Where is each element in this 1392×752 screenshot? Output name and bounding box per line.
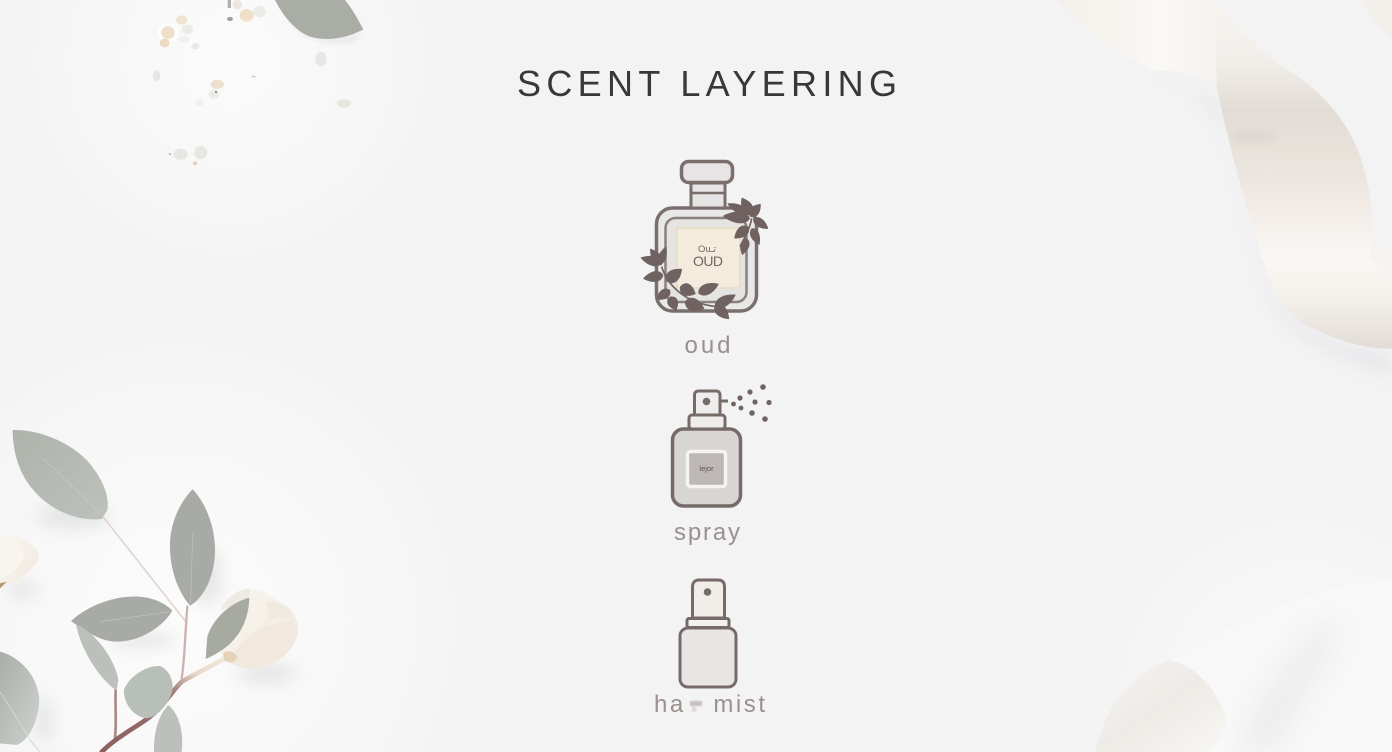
ribbon back — [1170, 580, 1392, 752]
leaf shadows — [8, 505, 297, 743]
leaf: left edge — [0, 652, 39, 745]
petals and seeds — [153, 0, 351, 165]
ribbon front fold — [1095, 660, 1227, 752]
ribbon corner — [1360, 0, 1392, 41]
title: SCENT LAYERING — [517, 63, 897, 104]
label smudge — [686, 693, 704, 714]
icon: oud perfume bottle — [639, 162, 771, 323]
leaf: round — [124, 666, 173, 718]
decoration: leaf and petals top left — [153, 0, 365, 165]
spray mist dots — [731, 384, 772, 422]
leaf: narrow — [76, 624, 118, 691]
item: oud bottle — [639, 162, 771, 359]
ribbon shadow — [1153, 73, 1392, 377]
decoration: satin ribbon top right — [1057, 0, 1392, 377]
bottle label: Ouتـ — [698, 244, 716, 255]
leaf: upright — [170, 489, 215, 606]
leaf: horizontal — [71, 597, 172, 642]
ribbon lower fold — [1368, 233, 1392, 283]
ribbon upper segment — [1057, 0, 1217, 87]
decoration: satin ribbon bottom right — [1095, 580, 1392, 752]
label: oud: oud — [684, 332, 730, 359]
bottle label: OUD — [693, 253, 723, 269]
leaf: bottom — [154, 705, 182, 752]
ribbon shadow band — [1237, 623, 1343, 752]
icon: hair mist bottle — [680, 580, 736, 687]
label: spray: spray — [674, 519, 740, 546]
icon: spray bottle — [672, 384, 772, 506]
shadow — [287, 17, 365, 43]
flower bud right — [218, 588, 298, 668]
stems — [30, 515, 225, 752]
label: hair mist: hair mist — [654, 691, 765, 718]
decoration: botanical branch bottom left — [0, 428, 298, 752]
item: spray bottle — [672, 384, 772, 546]
leaf: top left — [10, 428, 108, 519]
leaf on flower — [206, 598, 249, 659]
bottle label — [677, 228, 740, 288]
item: hair mist bottle — [654, 580, 765, 718]
ribbon fold shade — [1230, 129, 1277, 144]
leaves — [639, 195, 771, 323]
ribbon main segment — [1213, 0, 1392, 349]
leaf — [275, 0, 363, 39]
flower bud left — [0, 534, 39, 589]
bottle label: lejor — [699, 464, 714, 473]
